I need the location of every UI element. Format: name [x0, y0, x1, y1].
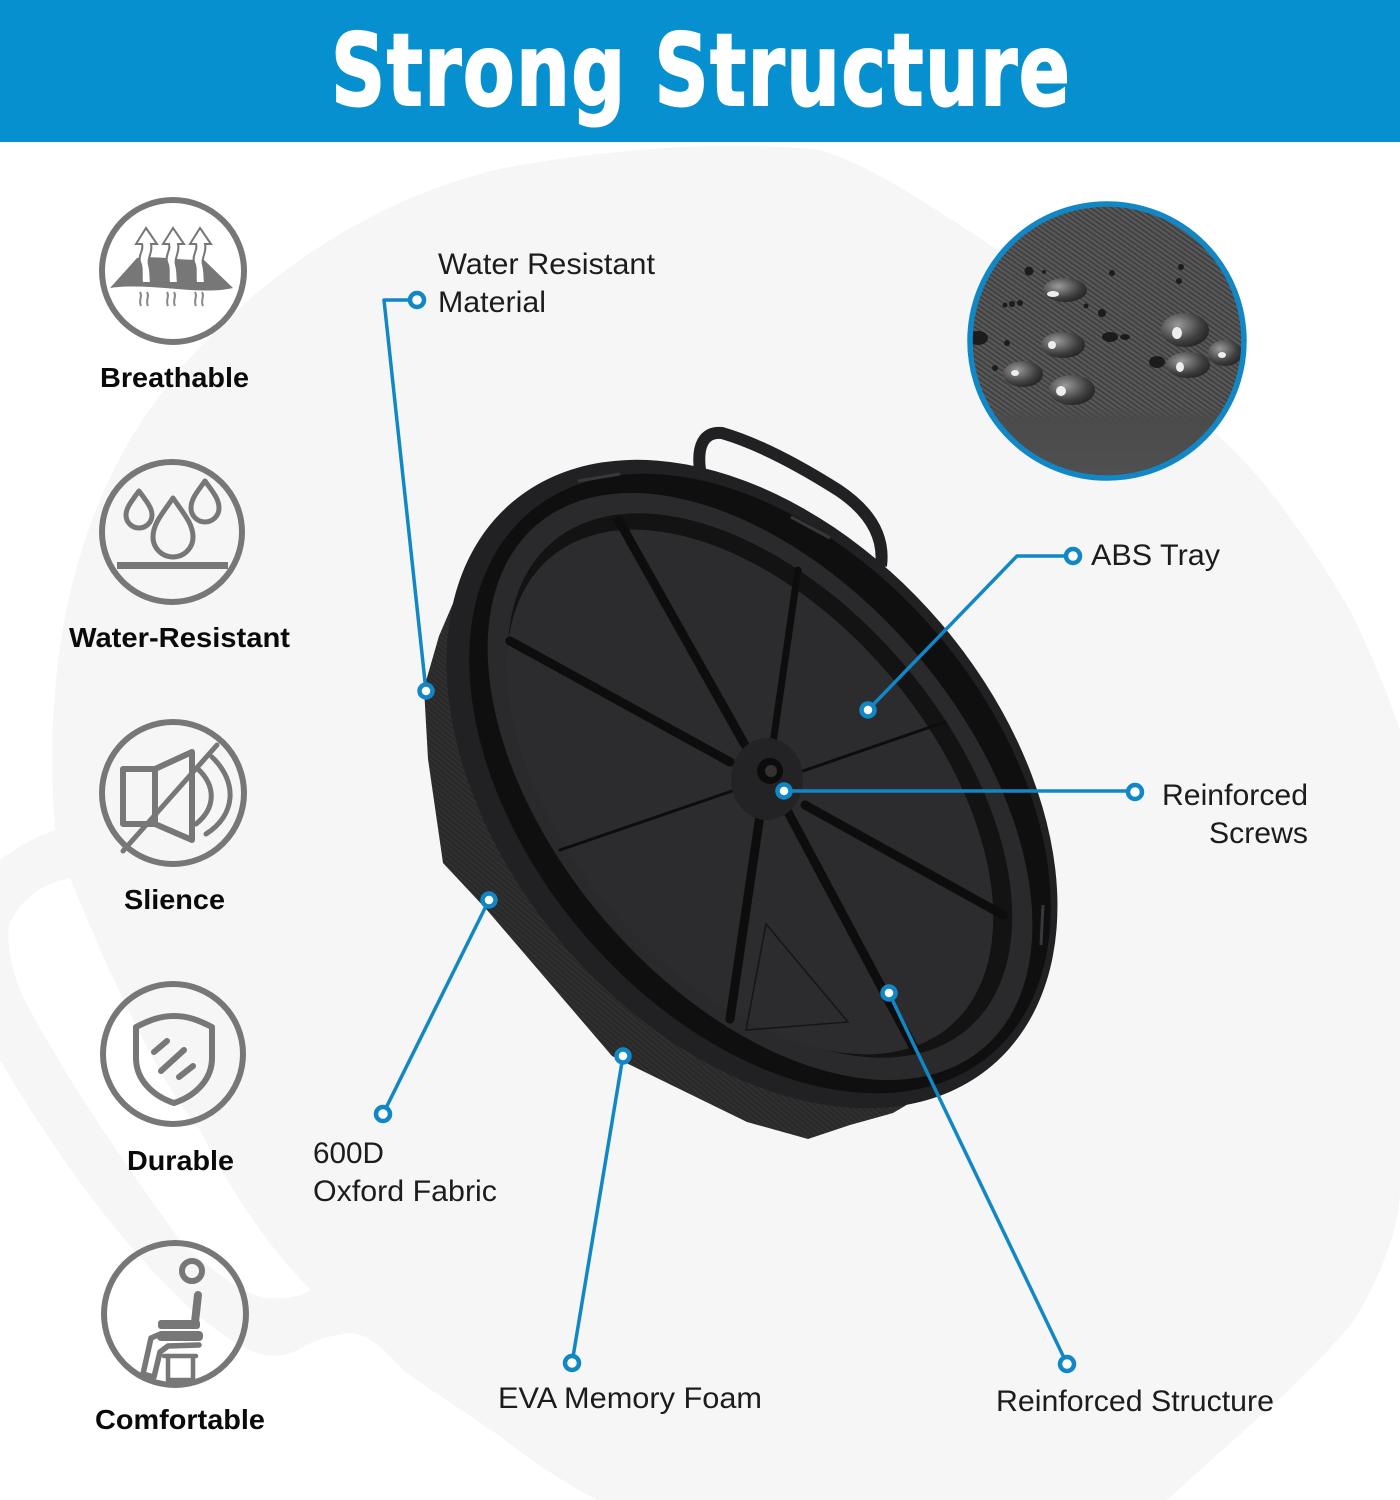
callout: reinforced structure — [882, 986, 1274, 1418]
icon: durable — [103, 984, 243, 1124]
tray raised ring — [381, 392, 1139, 1181]
label: comfortable: Comfortable — [95, 1404, 265, 1435]
callout: 600D oxford fabric: 600D — [313, 1137, 384, 1170]
icon: comfortable — [104, 1243, 246, 1385]
label: water-resistant: Water-Resistant — [69, 622, 290, 653]
callout: 600D oxford fabric — [313, 894, 497, 1208]
product: round bucket lid tray — [323, 342, 1181, 1226]
handle — [699, 433, 882, 566]
tray hub — [731, 738, 803, 820]
tray spokes — [510, 521, 1003, 1050]
label: durable: Durable — [127, 1145, 234, 1176]
tray outer rim — [323, 342, 1181, 1226]
triangle embossing — [746, 924, 848, 1030]
tray inner groove — [409, 420, 1111, 1151]
callout: water resistant material: Water Resistant — [438, 248, 656, 281]
tray plate — [412, 440, 1088, 1144]
icon: breathable — [102, 200, 244, 342]
icon: water resistant — [102, 462, 242, 602]
callout: reinforced screws: Screws — [1209, 817, 1308, 850]
icon: silence — [102, 722, 244, 864]
rim slots — [578, 474, 1043, 945]
fabric side wall — [424, 566, 915, 1139]
label: breathable: Breathable — [100, 362, 249, 393]
callout: water resistant material: Material — [438, 286, 546, 319]
callout: reinforced screws: Reinforced — [1162, 779, 1308, 812]
fabric swatch photo — [965, 200, 1250, 485]
callout: eva memory foam: EVA Memory Foam — [498, 1382, 762, 1415]
callout: reinforced structure: Reinforced Structure — [996, 1385, 1274, 1418]
callout: abs tray: ABS Tray — [1091, 539, 1220, 572]
callout: abs tray — [862, 539, 1220, 716]
title banner — [0, 0, 1400, 142]
callout: water resistant material — [384, 248, 656, 698]
callout: eva memory foam — [498, 1050, 762, 1415]
callout: reinforced screws — [778, 779, 1308, 850]
label: silence: Slience — [124, 884, 225, 915]
callout: 600D oxford fabric: Oxford Fabric — [313, 1175, 497, 1208]
title: Strong Structure — [331, 12, 1070, 129]
tray groove — [352, 362, 1168, 1205]
